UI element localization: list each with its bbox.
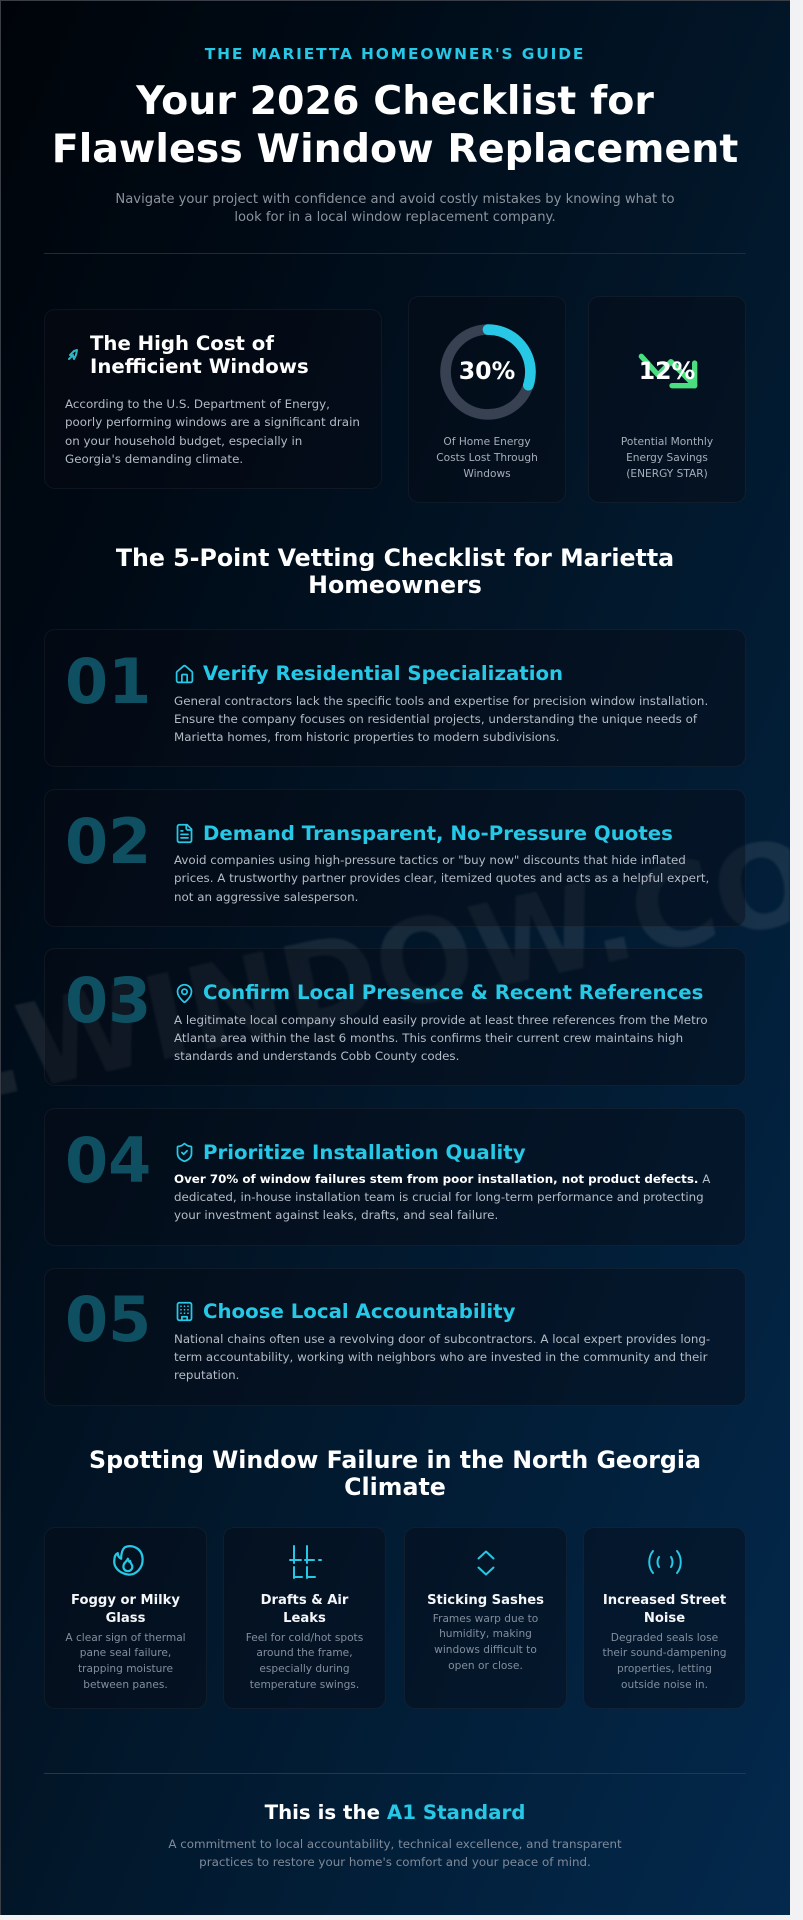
section heading: failure [89, 1446, 701, 1501]
step 1 number: 01 [65, 645, 151, 718]
card text [433, 1612, 538, 1672]
step 3 number: 03 [65, 964, 151, 1037]
icon: trending down [638, 354, 698, 388]
card body text: Georgia's demanding climate. [65, 452, 243, 466]
header divider [44, 253, 746, 254]
stat label: Energy Savings [626, 452, 708, 464]
icon: flame circle [113, 1545, 144, 1576]
card text: A clear sign of thermal [65, 1632, 186, 1644]
step 2 number: 02 [65, 804, 151, 878]
card title: Sticking Sashes [427, 1593, 544, 1608]
footer text: A commitment to local accountability, technical excellence, and transparent [168, 1837, 622, 1851]
step 1 text: General contractors lack the specific tools and expertise for precision window installation. [174, 694, 708, 708]
step 2 text: prices. A trustworthy partner provides clear, itemized quotes and acts as a helpful expert, [174, 871, 709, 885]
card text: temperature swings. [250, 1679, 359, 1691]
stat label: Potential Monthly [621, 436, 713, 448]
card text: pane seal failure, [80, 1647, 171, 1659]
card text: humidity, making [439, 1628, 532, 1640]
card text: between panes. [83, 1679, 168, 1691]
card title: Drafts & Air [261, 1593, 348, 1608]
card text: trapping moisture [78, 1663, 173, 1675]
card text: windows difficult to [434, 1644, 537, 1656]
step 5 [44, 1268, 746, 1406]
step 3 title: Confirm Local Presence & Recent References [203, 981, 703, 1004]
step 3 text [174, 1012, 708, 1063]
card heading: Inefficient Windows [90, 355, 309, 378]
step 1 icon: house [176, 664, 194, 684]
card heading [90, 332, 309, 378]
card body text: on your household budget, especially in [65, 434, 302, 448]
card text [65, 1632, 186, 1691]
step 2 title: Demand Transparent, No-Pressure Quotes [203, 822, 673, 844]
donut chart [440, 324, 536, 420]
panel: foggy glass [44, 1527, 207, 1709]
card body text: poorly performing windows are a significant drain [65, 415, 360, 429]
card title [603, 1593, 726, 1626]
step 4 text [174, 1172, 710, 1222]
section heading: checklist: The 5-Point Vetting Checklist for Marietta [116, 544, 674, 572]
step 4 icon: shield [176, 1142, 192, 1162]
footer divider [44, 1773, 746, 1774]
card text [602, 1632, 726, 1691]
step 2 text [174, 853, 709, 904]
step 4 text: dedicated, in-house installation team is crucial for long-term performance and protecting [174, 1190, 704, 1204]
title [52, 78, 738, 172]
step 1 text: Marietta homes, from historic properties to modern subdivisions. [174, 730, 559, 744]
step 1 title: Verify Residential Specialization [203, 662, 563, 685]
card text: around the frame, [256, 1647, 353, 1659]
footer text: practices to restore your home's comfort and your peace of mind. [199, 1855, 591, 1869]
step 3 [44, 948, 746, 1086]
panel: sticking sashes [404, 1527, 567, 1709]
subtitle: Navigate your project with confidence and avoid costly mistakes by knowing what to [115, 192, 675, 207]
card text: Degraded seals lose [611, 1632, 718, 1644]
section heading: failure: Climate [344, 1473, 446, 1501]
card text: outside noise in. [621, 1679, 708, 1691]
footer heading: This is the A1 Standard [265, 1801, 525, 1824]
step 1 text: Ensure the company focuses on residential projects, understanding the unique needs of [174, 712, 697, 726]
step 1 [44, 629, 746, 767]
panel: street noise [583, 1527, 746, 1709]
card text: their sound-dampening [603, 1647, 726, 1659]
step 4 text: Over 70% of window failures stem from poor installation, not product defects. A [174, 1172, 710, 1186]
step 3 icon: map pin [176, 984, 192, 1004]
stat label [621, 436, 713, 480]
step 5 text: reputation. [174, 1368, 239, 1382]
stat label [436, 436, 538, 480]
step 3 text: Atlanta area within the last 6 months. This confirms their current crew maintains high [174, 1031, 683, 1045]
title: Your 2026 Checklist for [136, 78, 654, 124]
step 2 text: Avoid companies using high-pressure tactics or "buy now" discounts that hide inflated [174, 853, 686, 867]
step 4 title: Prioritize Installation Quality [203, 1140, 526, 1164]
card title: Foggy or Milky [71, 1593, 180, 1608]
eyebrow: THE MARIETTA HOMEOWNER'S GUIDE [205, 45, 585, 63]
step 4 [44, 1108, 746, 1246]
step 5 text [174, 1332, 710, 1382]
step 5 text: National chains often use a revolving door of subcontractors. A local expert provides long- [174, 1332, 710, 1346]
title: Flawless Window Replacement [52, 126, 738, 172]
card text: Frames warp due to [433, 1612, 538, 1624]
card text: properties, letting [617, 1663, 712, 1675]
stat label: Windows [463, 468, 511, 480]
card heading: The High Cost of [90, 332, 274, 354]
stat label: Costs Lost Through [436, 452, 538, 464]
card text: open or close. [448, 1660, 523, 1672]
step 5 number: 05 [65, 1283, 151, 1356]
icon: chevrons [478, 1550, 494, 1576]
panel: 12% stat [588, 296, 746, 503]
step 2 [44, 788, 746, 926]
subtitle [115, 192, 675, 225]
footer text [168, 1837, 622, 1869]
stat value: 30% [459, 357, 515, 385]
step 4 number: 04 [65, 1124, 151, 1197]
card text: Feel for cold/hot spots [246, 1632, 363, 1644]
panel: high cost card [44, 309, 382, 489]
panel: 30% stat [408, 296, 566, 503]
icon: air leak [289, 1545, 322, 1579]
step 4 text: your investment against leaks, drafts, and seal failure. [174, 1208, 498, 1222]
step 3 text: standards and understands Cobb County codes. [174, 1049, 459, 1063]
step 5 icon: building [176, 1302, 192, 1322]
card title [261, 1593, 348, 1626]
icon: radio waves [648, 1550, 682, 1574]
stat label: Of Home Energy [443, 436, 531, 448]
section heading: checklist [116, 544, 674, 599]
step 3 text: A legitimate local company should easily provide at least three references from the Metro [174, 1012, 708, 1026]
card text [246, 1632, 363, 1691]
card body text [65, 397, 360, 466]
panel: drafts [223, 1527, 386, 1709]
step 2 icon: file [176, 824, 192, 844]
section heading: failure: Spotting Window Failure in the North Georgia [89, 1446, 701, 1474]
card title: Increased Street [603, 1593, 726, 1608]
step 2 text: not an aggressive salesperson. [174, 890, 358, 904]
section heading: checklist: Homeowners [308, 571, 482, 599]
icon: rocket [68, 349, 78, 360]
stat label: (ENERGY STAR) [626, 468, 708, 480]
step 1 text [174, 694, 708, 744]
stat value: 12% [639, 357, 695, 385]
subtitle: look for in a local window replacement company. [234, 210, 556, 225]
step 5 title: Choose Local Accountability [203, 1300, 515, 1323]
card title: Leaks [283, 1611, 326, 1626]
card body text: According to the U.S. Department of Energy, [65, 397, 330, 411]
card title: Noise [644, 1611, 685, 1626]
card title [71, 1593, 180, 1626]
card text: especially during [259, 1663, 350, 1675]
step 5 text: term accountability, working with neighbors who are invested in the community and their [174, 1350, 707, 1364]
card title: Glass [106, 1611, 145, 1626]
